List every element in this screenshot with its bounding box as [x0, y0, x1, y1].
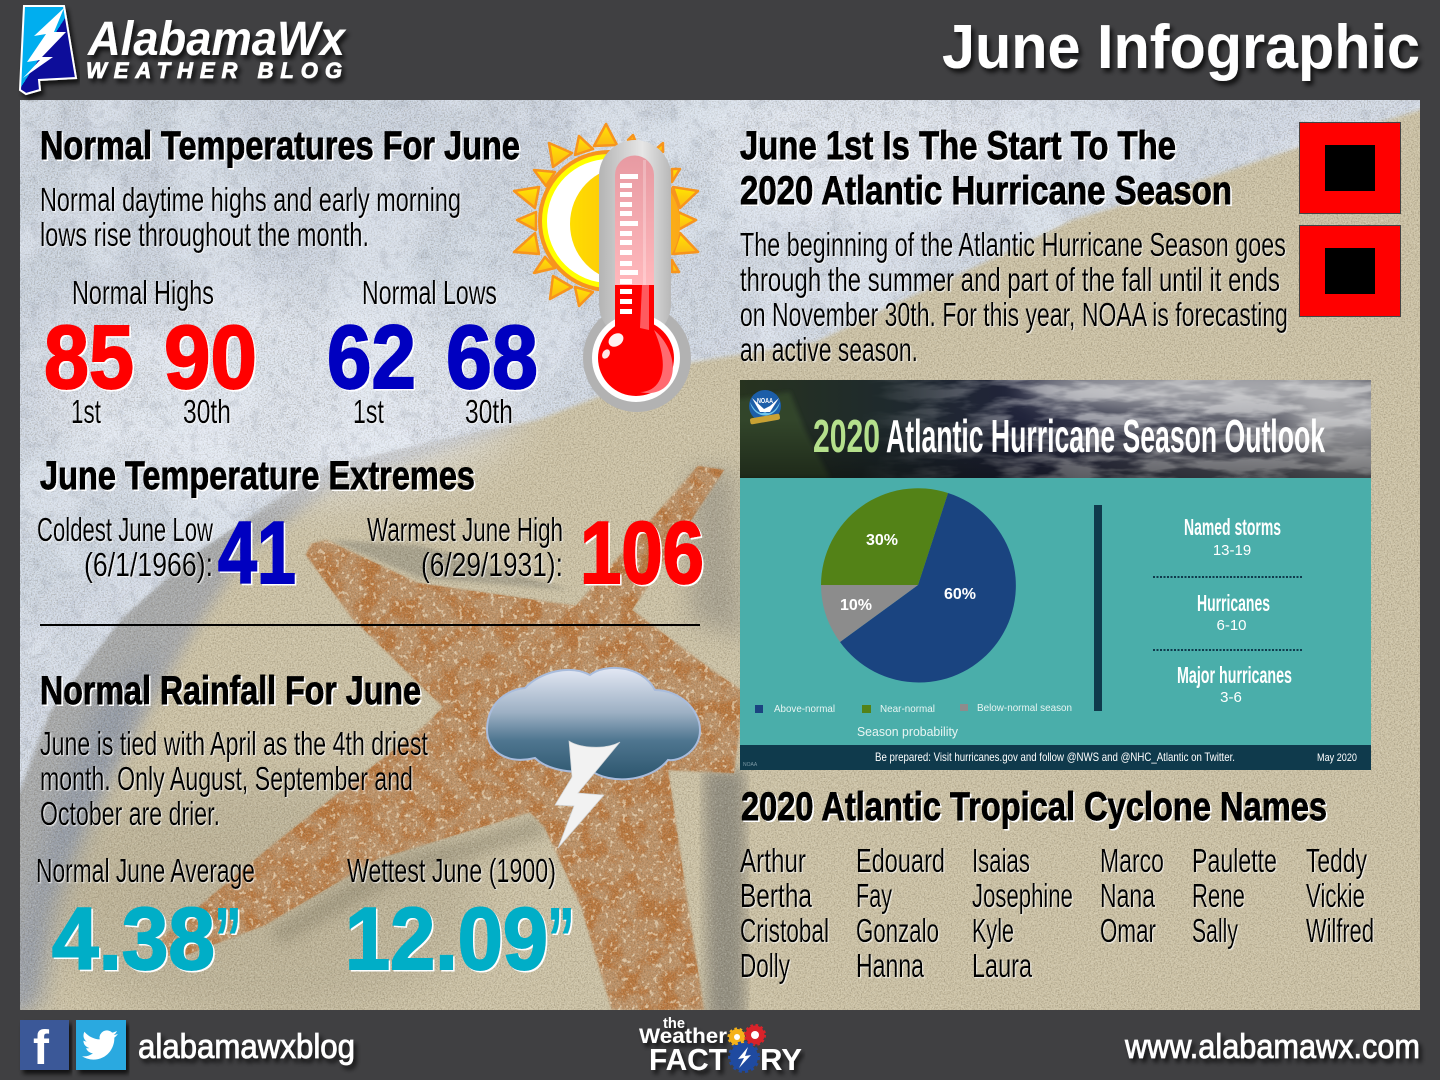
text block: temperature description [40, 181, 461, 253]
icon: facebook: f [33, 1022, 50, 1075]
normal highs values [44, 274, 257, 430]
icon: red gear [746, 1026, 764, 1044]
wettest june: Wettest June (1900) [347, 852, 556, 889]
names column 1: Cristobal [740, 912, 829, 949]
coldest june low: Coldest June Low [37, 511, 213, 548]
names column 2: Gonzalo [856, 912, 939, 949]
logo: the Weather Factory: Weather [639, 1025, 727, 1048]
normal lows values: 30th [465, 393, 513, 430]
outlook forecast numbers: Named storms [1184, 514, 1281, 540]
heading: hurricane season [740, 124, 1232, 213]
pie legend [755, 702, 1072, 739]
names column 6: Vickie [1306, 877, 1365, 914]
panel: 2020 Atlantic hurricane season outlook [730, 368, 1390, 770]
icon: Alabama state with lightning bolt [20, 6, 76, 94]
names column 5: Sally [1192, 912, 1238, 949]
icon: yellow gear [729, 1029, 745, 1045]
coldest june low: 41 [218, 503, 296, 602]
icon: NOAA logo: NOAA [757, 398, 773, 405]
names column 4: Omar [1100, 912, 1156, 949]
icon: NOAA logo [749, 390, 781, 425]
normal lows values: Normal Lows [362, 274, 497, 311]
names column 6 [1306, 842, 1374, 949]
normal highs values: 1st [71, 393, 101, 430]
coldest june low: (6/1/1966): [84, 546, 213, 583]
outlook footer bar: Be prepared: Visit hurricanes.gov and follow @NWS and @NHC_Atlantic on Twitter. [875, 750, 1235, 764]
outlook forecast numbers: Hurricanes [1197, 590, 1270, 616]
normal june average [36, 852, 255, 988]
normal lows values [327, 274, 538, 430]
names column 3: Josephine [972, 877, 1073, 914]
names column 3: Laura [972, 947, 1032, 984]
names column 5: Rene [1192, 877, 1245, 914]
panel: hurricane season [740, 122, 1400, 368]
warmest june high: Warmest June High [367, 511, 563, 548]
wettest june: 12.09 [345, 889, 548, 988]
names column 5: Paulette [1192, 842, 1277, 879]
names column 2: Edouard [856, 842, 945, 879]
normal highs values: 30th [183, 393, 231, 430]
text block: temperature description: Normal daytime highs and early morning [40, 181, 461, 218]
social handle: alabamawxblog [138, 1028, 355, 1066]
outlook satellite header [740, 380, 1371, 478]
icon: sun [514, 124, 698, 306]
normal lows values: 1st [353, 393, 384, 430]
normal june average: ” [214, 889, 242, 988]
text block: rainfall description: October are drier. [40, 795, 220, 832]
heading: rainfall: Normal Rainfall For June [40, 669, 421, 713]
names column 6: Teddy [1306, 842, 1367, 879]
names column 3 [972, 842, 1073, 984]
names column 4: Marco [1100, 842, 1164, 879]
text block: hurricane season description: an active season. [740, 331, 918, 368]
pie chart: season probability [821, 488, 1016, 683]
panel: temperature extremes [37, 454, 704, 602]
names column 2: Fay [856, 877, 892, 914]
pie legend: Above-normal [774, 703, 835, 715]
icon: facebook [20, 1020, 69, 1075]
pie chart: season probability: 10% [840, 597, 872, 614]
outlook forecast numbers: 3-6 [1220, 689, 1242, 706]
names column 3: Kyle [972, 912, 1014, 949]
logo: AlabamaWx Weather Blog [20, 6, 347, 94]
wettest june [345, 852, 575, 988]
logo: the Weather Factory: RY [760, 1042, 802, 1077]
names column 1: Bertha [740, 877, 812, 914]
outlook footer bar: NOAA [743, 762, 758, 768]
outlook forecast numbers [1153, 514, 1303, 706]
pie legend: Season probability [857, 724, 958, 739]
pie legend: Below-normal season [977, 702, 1072, 714]
pie chart: season probability: 30% [866, 532, 898, 549]
outlook forecast numbers: Major hurricanes [1177, 662, 1292, 688]
warmest june high: 106 [580, 503, 704, 602]
coldest june low [37, 503, 296, 602]
outlook footer bar [740, 745, 1371, 770]
logo tagline: WEATHER BLOG [86, 58, 342, 83]
normal lows values: 68 [446, 308, 538, 408]
icon: twitter [76, 1020, 126, 1070]
names column 3: Isaias [972, 842, 1030, 879]
warmest june high: (6/29/1931): [421, 546, 563, 583]
panel: tropical cyclone names [740, 785, 1374, 984]
outlook title: 2020 [813, 410, 880, 462]
names column 1: Arthur [740, 842, 806, 879]
logo: the Weather Factory: the [663, 1015, 685, 1032]
text block: rainfall description: month. Only August, September and [40, 760, 413, 797]
text block: rainfall description [40, 725, 428, 832]
outlook forecast numbers: 13-19 [1213, 542, 1251, 559]
heading: hurricane season: 2020 Atlantic Hurricane Season [740, 169, 1232, 213]
title: June Infographic [942, 13, 1420, 82]
normal june average: 4.38 [52, 889, 215, 988]
outlook footer bar: May 2020 [1317, 752, 1357, 764]
heading: hurricane season: June 1st Is The Start To The [740, 124, 1176, 168]
warmest june high [367, 503, 704, 602]
heading: cyclone names: 2020 Atlantic Tropical Cyclone Names [741, 785, 1327, 829]
panel: normal rainfall [36, 669, 575, 988]
outlook teal body [740, 478, 1371, 746]
names column 4: Nana [1100, 877, 1155, 914]
names column 4 [1100, 842, 1164, 949]
icon: hurricane warning flags [1300, 122, 1400, 316]
outlook forecast numbers: 6-10 [1216, 617, 1247, 634]
panel: normal temperatures [40, 124, 538, 430]
pie chart: season probability: 60% [944, 586, 976, 603]
names column 1: Dolly [740, 947, 790, 984]
text block: hurricane season description [740, 226, 1288, 368]
names column 1 [740, 842, 829, 984]
heading: normal temperatures: Normal Temperatures For June [40, 124, 520, 168]
normal highs values: 85 [44, 308, 134, 408]
normal highs values: Normal Highs [72, 274, 214, 311]
normal lows values: 62 [327, 308, 416, 408]
names column 5 [1192, 842, 1277, 949]
icon: thermometer [583, 140, 691, 412]
logo: the Weather Factory [639, 1015, 802, 1077]
pie legend: Near-normal [880, 703, 935, 715]
icon: storm cloud with lightning [487, 668, 700, 848]
icon: blue gear [730, 1043, 758, 1071]
wettest june: ” [547, 889, 575, 988]
heading: extremes: June Temperature Extremes [40, 454, 475, 498]
names column 2: Hanna [856, 947, 924, 984]
names column 2 [856, 842, 945, 984]
names column 6: Wilfred [1306, 912, 1374, 949]
normal june average: Normal June Average [36, 852, 255, 889]
text block: temperature description: lows rise throughout the month. [40, 216, 369, 253]
normal highs values: 90 [164, 308, 257, 408]
logo: the Weather Factory: FACT [649, 1042, 727, 1077]
footer: social links [20, 1020, 355, 1075]
text block: rainfall description: June is tied with April as the 4th driest [40, 725, 428, 762]
logo wordmark: AlabamaWx [87, 13, 347, 66]
